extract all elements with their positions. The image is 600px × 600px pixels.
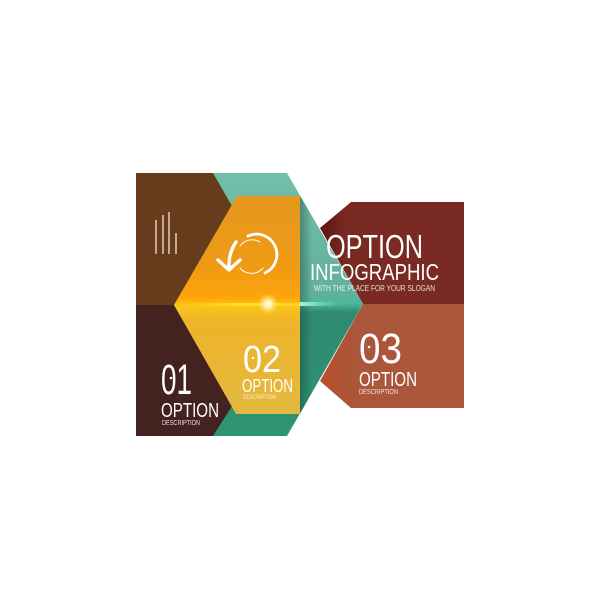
text block: option 03 (359, 325, 417, 396)
text block: option 01: 01 (161, 356, 192, 404)
text block: option 01: OPTION (161, 400, 219, 422)
heading: option infographic: OPTION (326, 228, 423, 265)
panel: lower dark brown block (136, 305, 232, 436)
icon: cycle arrow (218, 234, 277, 273)
text block: option 02 (242, 339, 293, 401)
panel: upper brown block (136, 173, 232, 305)
panel: lower terracotta arrow (320, 304, 464, 408)
heading: option infographic: WITH THE PLACE FOR YOUR SLOGAN (314, 283, 435, 293)
panel: yellow lower block (174, 305, 300, 414)
panel: teal hexagon (174, 173, 363, 436)
heading: option infographic (310, 228, 439, 293)
light flare (178, 293, 340, 315)
icon: bars (156, 212, 176, 254)
text block: option 03: DESCRIPTION (359, 389, 398, 396)
text block: option 03: 03 (359, 325, 402, 373)
text block: option 01: DESCRIPTION (162, 420, 200, 427)
text block: option 01 (161, 356, 219, 427)
panel: upper red arrow (320, 202, 464, 304)
text block: option 03: OPTION (359, 369, 417, 391)
heading: option infographic: INFOGRAPHIC (310, 259, 439, 285)
text block: option 02: DESCRIPTION (243, 394, 276, 401)
text block: option 02: 02 (243, 339, 281, 381)
panel: orange upper block (174, 196, 300, 305)
teal shadow beside the yellow block (300, 196, 312, 414)
text block: option 02: OPTION (242, 376, 293, 396)
